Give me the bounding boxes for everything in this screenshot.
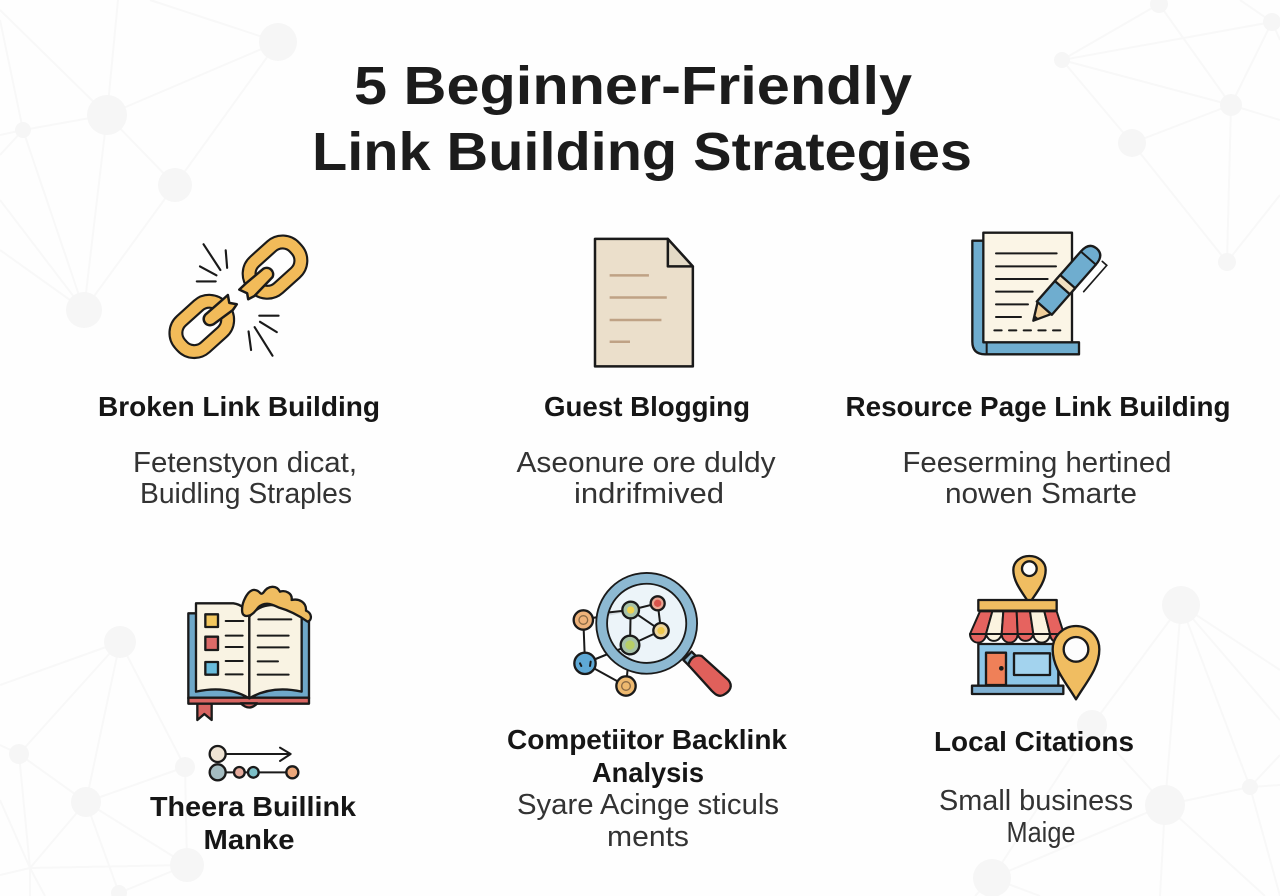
description: Buidling Straples [140,478,352,510]
heading: Theera Buillink [150,791,356,822]
icon: magnifier over network [574,578,731,696]
card: guest blogging [516,239,776,510]
title: 5 Beginner-Friendly [354,56,912,116]
icon: link path [210,746,298,780]
description [517,789,779,853]
description: Feeserming hertined [902,447,1172,479]
description [939,785,1133,849]
icon: document [595,239,693,366]
description: Aseonure ore duldy [516,447,776,479]
card: local citations [934,556,1134,849]
heading: Manke [204,824,294,855]
heading: Competiitor Backlink [507,724,787,755]
description: ments [607,821,689,853]
description [902,447,1172,510]
icon: notebook and pen [972,233,1111,354]
description: Fetenstyon dicat, [133,447,357,479]
icon: broken chain [169,235,308,358]
card: broken link building [98,235,380,510]
description: Syare Acinge sticuls [517,789,779,821]
description: Maige [1006,817,1076,849]
icon: open book [188,587,311,720]
description: nowen Smarte [945,478,1137,510]
heading: Resource Page Link Building [846,391,1230,422]
description [133,447,357,510]
title: Link Building Strategies [312,122,972,182]
card: resource page link building [846,233,1230,510]
heading: Local Citations [934,726,1134,757]
heading [150,791,356,855]
heading [507,724,787,788]
icon: store with map pins [970,556,1099,699]
title [312,56,972,182]
description: indrifmived [574,478,724,510]
card: theera buillink manke [150,587,356,855]
heading: Analysis [592,757,704,788]
heading: Guest Blogging [544,391,750,422]
description [516,447,776,510]
card: competitor backlink analysis [507,578,787,853]
heading: Broken Link Building [98,391,380,422]
description: Small business [939,785,1133,817]
